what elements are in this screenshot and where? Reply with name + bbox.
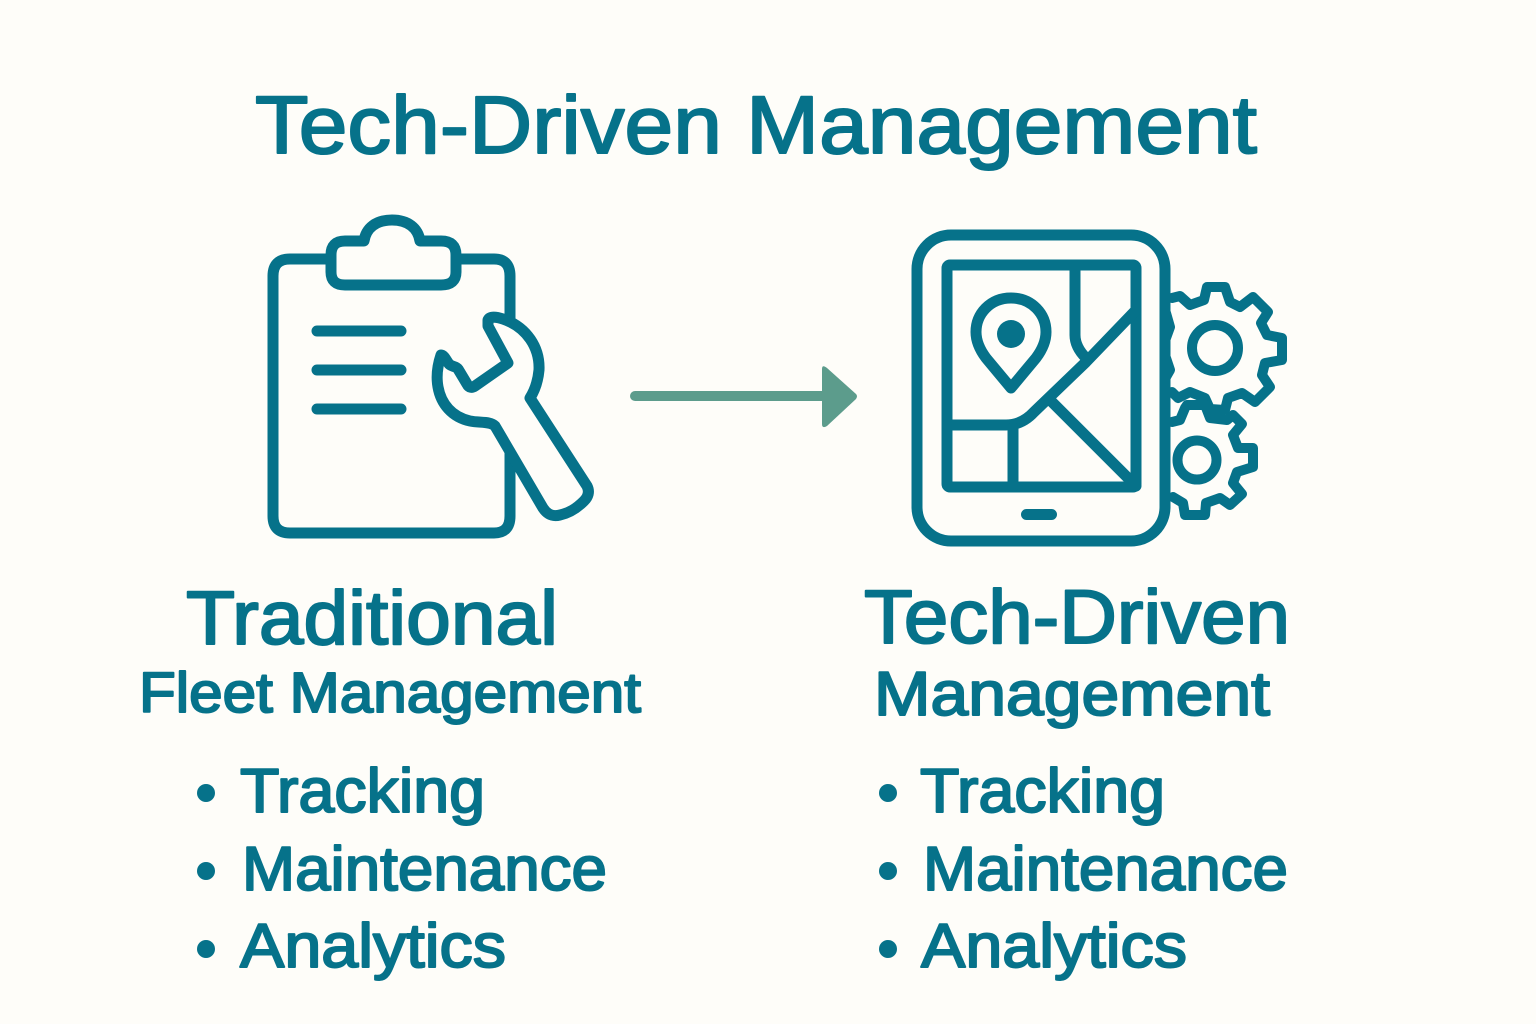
icon: tablet with map [917, 235, 1165, 541]
left heading: Fleet Management [139, 661, 641, 725]
left heading: Traditional [186, 576, 558, 661]
left bullet list: Maintenance [242, 835, 607, 904]
title: Tech-Driven Management [255, 80, 1257, 171]
arrow [635, 366, 857, 427]
left bullet list: Tracking [240, 757, 485, 826]
right bullet list: Analytics [921, 912, 1187, 981]
icon: clipboard with wrench [273, 220, 588, 533]
left bullet list [197, 757, 607, 981]
icon: gears [1166, 287, 1282, 515]
right heading: Management [874, 660, 1270, 729]
right heading: Tech-Driven [864, 575, 1290, 660]
right bullet list [879, 757, 1288, 981]
left bullet list: Analytics [240, 912, 506, 981]
right heading [864, 575, 1290, 729]
left heading [139, 576, 641, 725]
right bullet list: Tracking [920, 757, 1165, 826]
right bullet list: Maintenance [923, 835, 1288, 904]
